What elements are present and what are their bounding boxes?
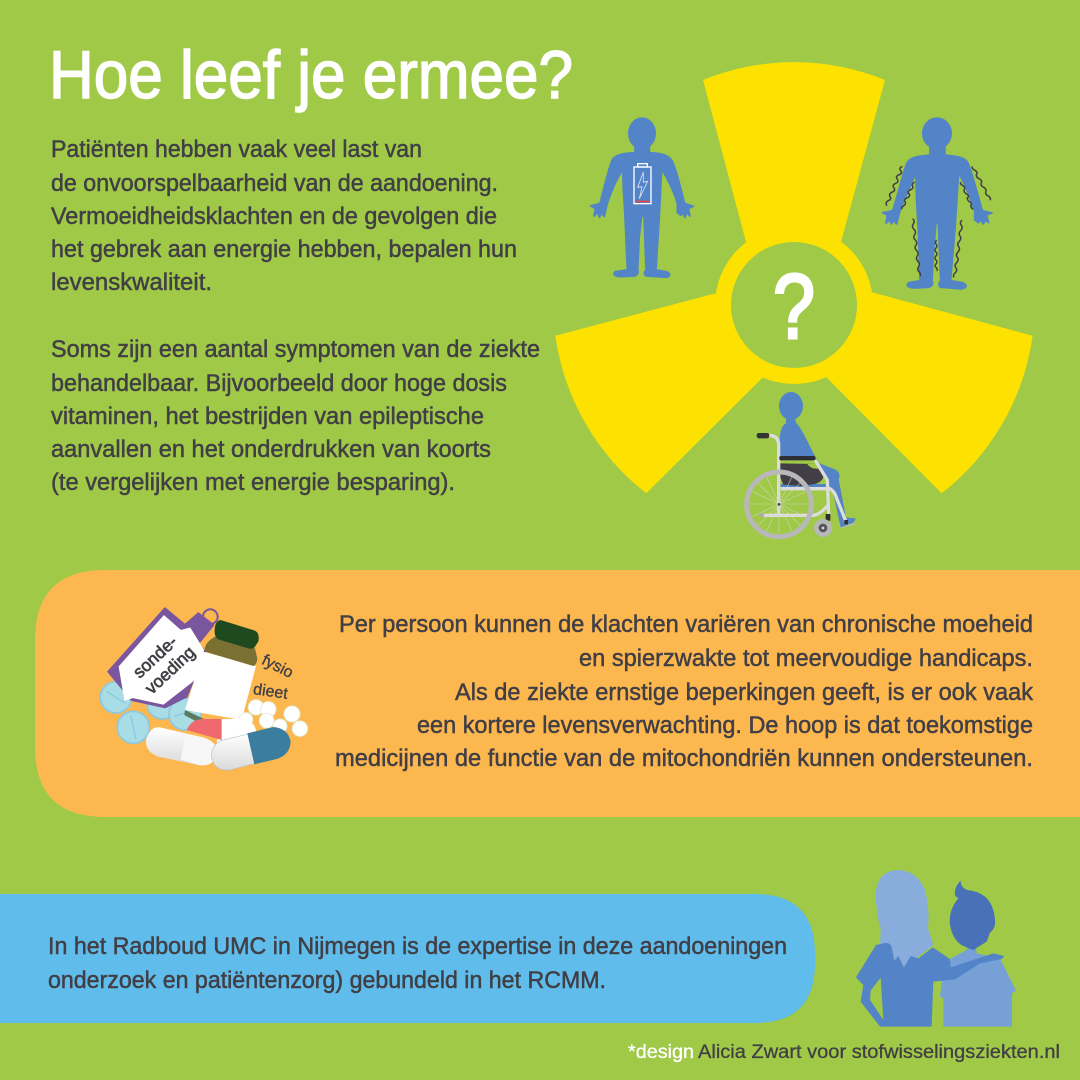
icon: person in wheelchair <box>747 392 856 537</box>
text block: intro paragraph: het gebrek aan energie hebben, bepalen hun <box>51 236 517 263</box>
text block: treatment paragraph: Soms zijn een aantal symptomen van de ziekte <box>51 336 540 363</box>
text block: symptoms description: Als de ziekte ernstige beperkingen geeft, is er ook vaak <box>455 679 1034 706</box>
text block: symptoms description: Per persoon kunnen de klachten variëren van chronische moeheid <box>339 611 1033 638</box>
icon: person with trembling muscles <box>883 117 992 289</box>
title: Hoe leef je ermee? <box>49 37 573 113</box>
icon: two people with arm around shoulder <box>856 870 1016 1027</box>
text block: treatment paragraph <box>51 336 540 496</box>
text block: intro paragraph: Patiënten hebben vaak veel last van <box>51 136 422 163</box>
panel: orange symptoms band <box>35 570 1080 817</box>
text block: Radboud UMC <box>48 933 787 994</box>
text block: intro paragraph: Vermoeidheidsklachten en de gevolgen die <box>51 203 497 230</box>
icon: radiation symbol with question mark: ? <box>773 256 815 358</box>
icon: medicine pile with tube feeding, pills and bottle: sonde- <box>129 631 181 682</box>
panel: blue expertise band <box>0 894 815 1023</box>
text block: intro paragraph: levenskwaliteit. <box>51 269 212 296</box>
text block: treatment paragraph: (te vergelijken met energie besparing). <box>51 469 455 496</box>
text block: treatment paragraph: behandelbaar. Bijvoorbeeld door hoge dosis <box>51 370 507 397</box>
icon: medicine pile with tube feeding, pills and bottle: voeding <box>141 642 199 698</box>
text block: symptoms description: en spierzwakte tot meervoudige handicaps. <box>579 645 1033 672</box>
text block: symptoms description: een kortere levensverwachting. De hoop is dat toekomstige <box>417 712 1033 739</box>
text block: Radboud UMC: In het Radboud UMC in Nijmegen is de expertise in deze aandoeningen <box>48 933 787 960</box>
text block: treatment paragraph: aanvallen en het onderdrukken van koorts <box>51 436 491 463</box>
text block: intro paragraph <box>51 136 517 296</box>
text block: Radboud UMC: onderzoek en patiëntenzorg) gebundeld in het RCMM. <box>48 967 606 994</box>
icon: person with empty battery <box>591 117 693 277</box>
icon: medicine pile with tube feeding, pills and bottle <box>100 608 308 770</box>
text block: intro paragraph: de onvoorspelbaarheid van de aandoening. <box>51 170 498 197</box>
icon: medicine pile with tube feeding, pills and bottle: fysio <box>259 652 296 682</box>
credit line: *design <box>628 1041 694 1063</box>
text block: treatment paragraph: vitaminen, het bestrijden van epileptische <box>51 403 484 430</box>
icon: medicine pile with tube feeding, pills and bottle: dieet <box>252 681 289 703</box>
icon: radiation symbol with question mark <box>540 62 1048 502</box>
text block: symptoms description: medicijnen de functie van de mitochondriën kunnen ondersteunen. <box>335 745 1033 772</box>
credit line: Alicia Zwart voor stofwisselingsziekten.nl <box>698 1041 1060 1063</box>
text block: symptoms description <box>335 611 1034 772</box>
